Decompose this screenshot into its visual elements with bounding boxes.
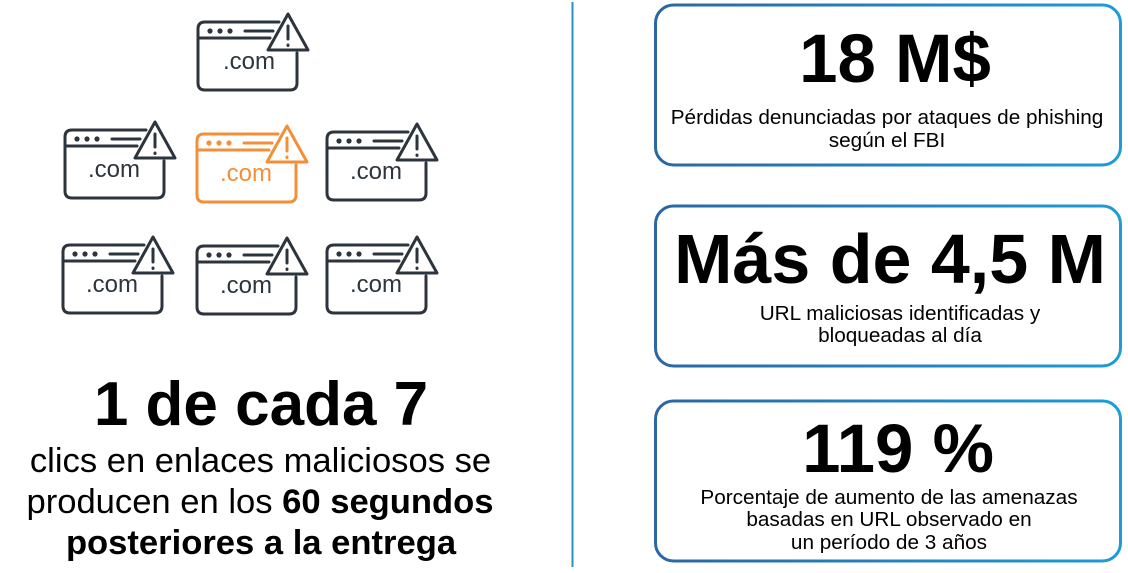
icon: browser warning highlighted orange	[197, 126, 307, 202]
panel: Más de 4,5 M	[656, 206, 1120, 366]
caption: threat increase: un período de 3 años	[791, 531, 987, 554]
caption: FBI losses: según el FBI	[829, 129, 945, 152]
caption: threat increase: basadas en URL observado en	[746, 508, 1032, 531]
icon: browser warning row 3 left: .com	[86, 271, 138, 298]
icon: browser warning row 3 right: .com	[350, 271, 402, 298]
text block: lead description: producen en los 60 segundos	[26, 483, 494, 521]
icon: browser warning row 3 middle: .com	[220, 272, 272, 299]
text block: lead description	[26, 442, 494, 562]
icon: browser warning top: .com	[223, 48, 275, 75]
icon: browser warning row 2 left: .com	[88, 156, 140, 183]
icon: browser warning row 3 right	[327, 237, 437, 313]
stat: 18 M$: 18 M$	[799, 20, 991, 97]
icon: browser warning row 3 left	[63, 237, 173, 313]
caption: FBI losses	[671, 106, 1103, 152]
caption: malicious URLs: bloqueadas al día	[818, 324, 982, 347]
icon: browser warning row 2 left	[65, 122, 175, 198]
panel: 18 M$	[656, 5, 1120, 165]
icon: browser warning row 2 right	[327, 124, 437, 200]
icon: browser warning top	[198, 14, 308, 90]
caption: threat increase	[700, 486, 1078, 554]
caption: FBI losses: Pérdidas denunciadas por ataques de phishing	[671, 106, 1103, 129]
icon: browser warning row 3 middle	[197, 238, 307, 314]
stat: Más de 4,5 M: Más de 4,5 M	[674, 220, 1106, 298]
text block: lead description: clics en enlaces maliciosos se	[30, 442, 491, 480]
stat: 119 %: 119 %	[802, 410, 994, 487]
caption: malicious URLs: URL maliciosas identificadas y	[760, 302, 1041, 325]
icon: browser warning row 2 right: .com	[350, 158, 402, 185]
heading: 1 de cada 7: 1 de cada 7	[94, 370, 428, 439]
caption: threat increase: Porcentaje de aumento de las amenazas	[700, 486, 1078, 509]
icon: browser warning highlighted orange: .com	[220, 160, 272, 187]
text block: lead description: posteriores a la entrega	[66, 524, 457, 562]
panel: 119 %	[656, 401, 1120, 561]
caption: malicious URLs	[760, 302, 1041, 347]
